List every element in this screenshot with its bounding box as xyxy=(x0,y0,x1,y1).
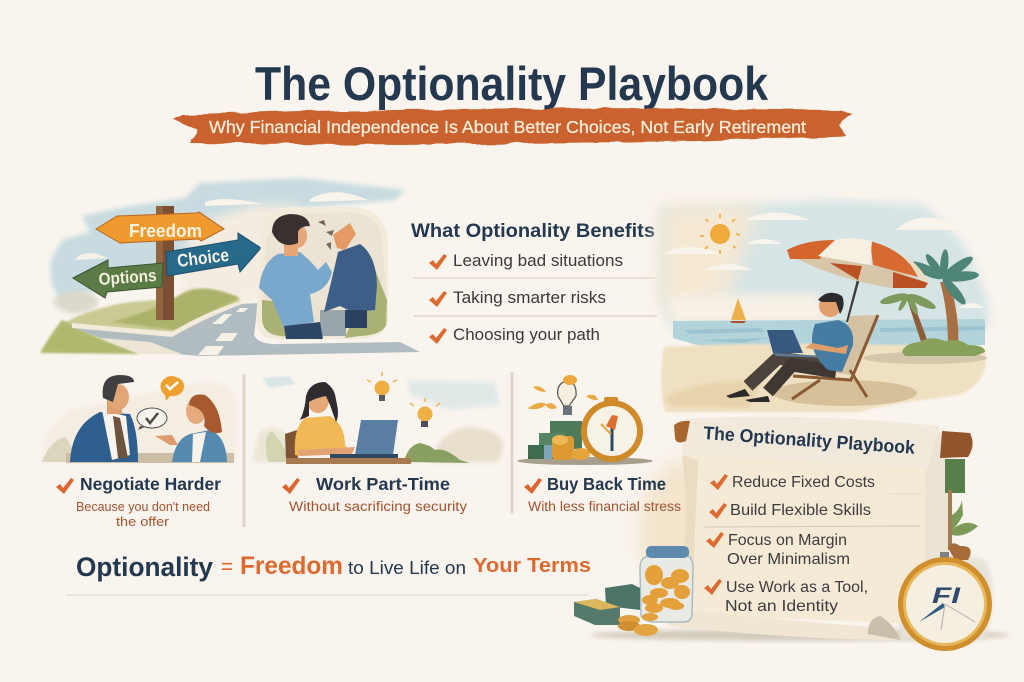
conflict sparks xyxy=(318,220,334,250)
deck chair xyxy=(792,315,878,399)
heading: Negotiate Harder xyxy=(80,474,221,494)
panel: crossroads illustration xyxy=(40,178,420,356)
coins in jar xyxy=(642,565,690,621)
signpost xyxy=(73,206,261,320)
sign: options xyxy=(73,260,163,298)
scroll body xyxy=(682,440,945,625)
formula: optionality equals freedom: Optionality xyxy=(76,552,213,582)
taupe backdrop behind clock xyxy=(900,552,992,640)
heading: Work Part-Time xyxy=(316,474,450,494)
road xyxy=(72,302,420,356)
formula: optionality equals freedom xyxy=(76,552,591,582)
loose coins xyxy=(618,615,640,625)
woman xyxy=(155,394,227,462)
sea xyxy=(673,319,985,346)
illustration xyxy=(517,375,653,465)
stopwatch xyxy=(581,397,643,462)
sign: choice: Choice xyxy=(176,245,230,271)
formula: optionality equals freedom: Your Terms xyxy=(473,555,591,577)
subtitle banner xyxy=(174,108,852,145)
icon: FI stopwatch: FI xyxy=(932,583,961,608)
panel: beach illustration xyxy=(660,191,988,412)
sign: freedom xyxy=(96,212,224,243)
description: the offer xyxy=(116,514,170,529)
speech bubbles xyxy=(137,376,184,430)
benefit 1: Leaving bad situations xyxy=(453,252,623,270)
sand xyxy=(661,344,986,412)
formula: optionality equals freedom: Freedom xyxy=(240,552,343,580)
illustration xyxy=(252,372,504,464)
panel: work part-time xyxy=(252,372,504,514)
cash stacks xyxy=(528,421,582,459)
illustration: jar of coins and cash xyxy=(574,546,693,636)
scroll top band xyxy=(682,417,940,468)
panel: playbook scroll xyxy=(590,417,1010,641)
subtitle banner: Why Financial Independence Is About Better Choices, Not Early Retirement xyxy=(209,117,806,137)
woman at laptop xyxy=(285,382,355,460)
palm trees xyxy=(879,249,985,356)
formula: optionality equals freedom: to Live Life on xyxy=(348,558,466,578)
person: blue shirt xyxy=(259,214,332,339)
light bulb with coins xyxy=(528,375,598,415)
briefcase xyxy=(320,310,346,336)
man with laptop xyxy=(726,293,853,402)
description: Without sacrificing security xyxy=(289,499,467,514)
benefit 3: Choosing your path xyxy=(453,326,600,344)
green ribbon xyxy=(945,459,965,493)
sky wash xyxy=(50,178,405,313)
laptop xyxy=(330,420,398,458)
businessman xyxy=(70,375,138,462)
item 4: Use Work as a Tool, xyxy=(726,579,868,596)
warm wash around scroll xyxy=(640,460,740,600)
title: The Optionality Playbook xyxy=(255,57,769,110)
chair shadow xyxy=(773,380,917,406)
sign: choice xyxy=(166,233,261,276)
item 2: Build Flexible Skills xyxy=(730,502,871,519)
clouds xyxy=(662,191,984,308)
sailboat xyxy=(730,298,746,323)
beach sky xyxy=(660,200,988,330)
beach umbrella xyxy=(787,238,929,322)
item 3: Focus on Margin xyxy=(728,532,847,549)
laptop xyxy=(767,330,826,358)
panel: buy back time xyxy=(517,375,681,514)
green hills xyxy=(40,288,240,354)
sign: options: Options xyxy=(98,266,157,289)
item 1: Reduce Fixed Costs xyxy=(732,474,875,491)
sun xyxy=(700,214,740,254)
panel: negotiate harder xyxy=(40,375,236,529)
item 3 xyxy=(706,532,850,568)
person: navy suit xyxy=(324,223,377,328)
heading: Buy Back Time xyxy=(547,474,666,494)
scene: two people talking xyxy=(256,207,388,340)
description: Because you don't need xyxy=(76,499,210,514)
illustration xyxy=(40,375,236,463)
table xyxy=(286,458,411,464)
coins xyxy=(552,435,590,460)
sign: freedom: Freedom xyxy=(129,221,202,241)
description: With less financial stress xyxy=(528,499,681,514)
light bulbs xyxy=(367,372,440,427)
formula: optionality equals freedom: = xyxy=(221,554,233,579)
scroll title: The Optionality Playbook xyxy=(703,422,916,458)
heading: What Optionality Benefits xyxy=(411,220,655,242)
item 4: Not an Identity xyxy=(725,598,838,615)
benefit 2: Taking smarter risks xyxy=(453,289,606,307)
icon: FI stopwatch xyxy=(898,543,992,651)
cash stacks xyxy=(605,584,640,610)
description xyxy=(76,499,210,529)
item 4 xyxy=(704,579,868,615)
panel: what optionality benefits xyxy=(411,220,657,344)
item 3: Over Minimalism xyxy=(727,551,850,568)
wooden roller xyxy=(940,431,973,458)
scroll bottom curl xyxy=(663,606,900,640)
